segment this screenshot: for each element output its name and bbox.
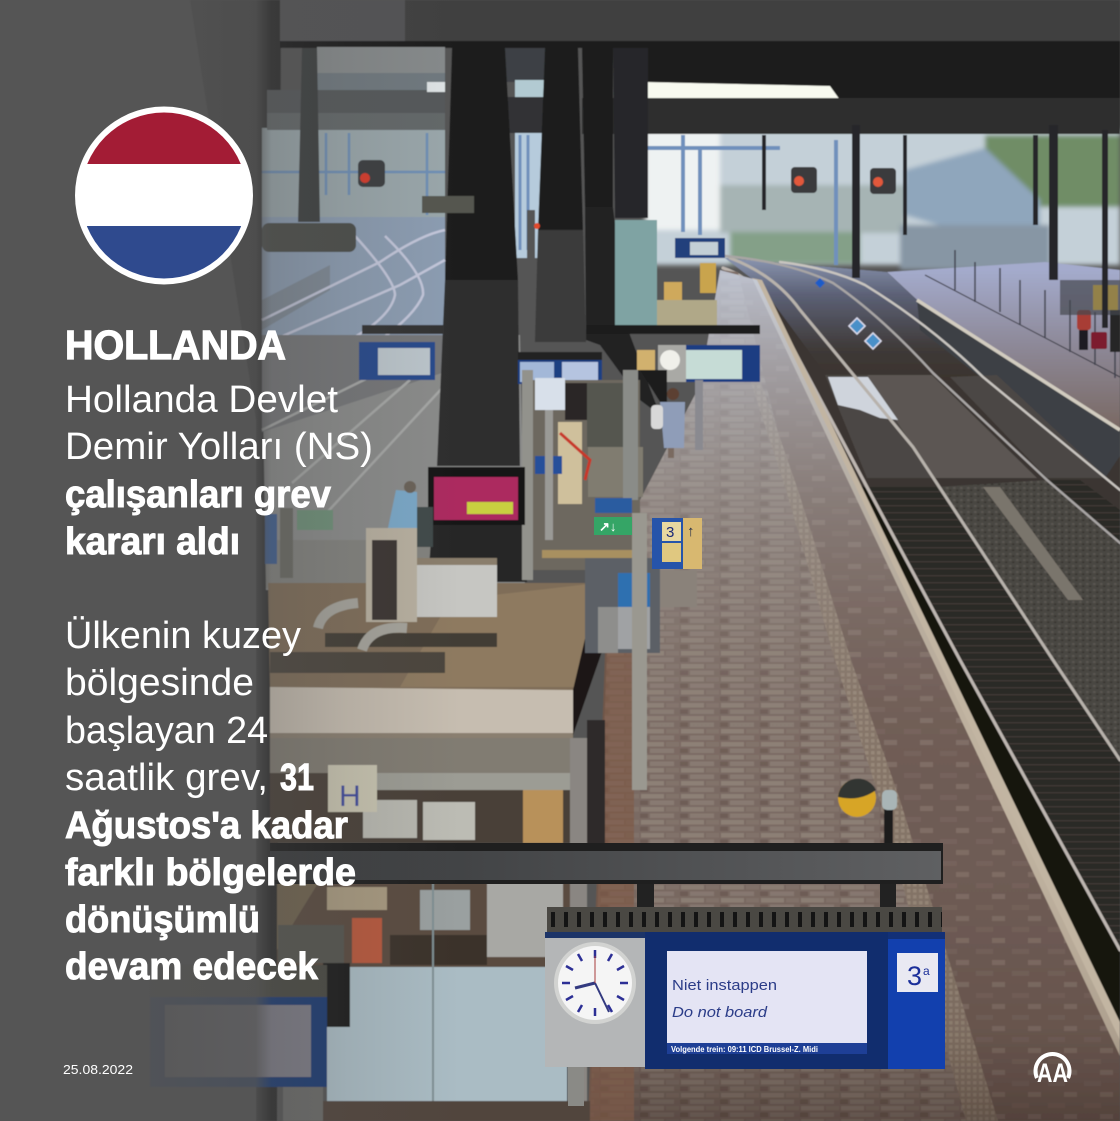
- departure board: [545, 907, 945, 1069]
- blue display panel: [645, 932, 888, 1069]
- sign post: [632, 513, 647, 790]
- logo: Anadolu Agency: AA: [1037, 1058, 1068, 1088]
- track marker diamonds: [815, 278, 881, 349]
- rooftop AC unit: [366, 528, 417, 622]
- subheading text block: çalışanları grev: [65, 474, 331, 516]
- left post and exit sign: [265, 514, 277, 564]
- lower left information board: [150, 965, 327, 1087]
- track bed: [725, 258, 1120, 1040]
- exit sign: ↗↓: [599, 519, 616, 534]
- body text block: dönüşümlü: [65, 899, 260, 941]
- rooftop box: [417, 558, 497, 617]
- body text block: [65, 615, 356, 988]
- yellow platform signs: [657, 238, 725, 325]
- clock: [554, 942, 636, 1024]
- walking passenger: [651, 388, 685, 458]
- sign board left: [359, 342, 435, 380]
- sign board right with clock: [660, 345, 760, 382]
- body text block: başlayan 24: [65, 710, 268, 752]
- exit sign: [594, 517, 632, 535]
- date: 25.08.2022: [63, 1062, 133, 1077]
- distant yard, left: [262, 128, 445, 345]
- departure board: Do not board: [672, 1004, 768, 1021]
- platform number sign: 3: [666, 524, 674, 541]
- departure board: Niet instappen: [672, 977, 777, 994]
- signal lights: [358, 160, 896, 194]
- far platform with fence: [887, 262, 1120, 430]
- body text block: saatlik grev,: [65, 757, 268, 799]
- H sign: [328, 765, 377, 813]
- flag of the Netherlands: [75, 106, 253, 284]
- distant yard and sky, right: [645, 130, 1120, 270]
- platform number sign: ↑: [687, 523, 694, 540]
- subheading text block: Hollanda Devlet: [65, 379, 338, 421]
- wet reflection on tracks: [803, 377, 898, 420]
- subheading text block: kararı aldı: [65, 521, 240, 563]
- departure board: a: [923, 964, 930, 978]
- body text block: bölgesinde: [65, 662, 254, 704]
- main platform surface: [590, 270, 1120, 1121]
- platform number sign: [652, 518, 702, 569]
- advert screen: [428, 467, 525, 525]
- departure board: 3: [907, 961, 922, 991]
- columns, right: [762, 125, 1108, 328]
- seated person: [388, 481, 433, 547]
- yellow platform lamp: [838, 779, 897, 844]
- heading: HOLLANDA: [65, 322, 286, 368]
- sign beams: [586, 325, 760, 334]
- rooftop: [268, 583, 598, 690]
- departure board: Volgende trein: 09:11 ICD Brussel-Z. Midi: [671, 1045, 818, 1054]
- rails: [723, 256, 1120, 950]
- left platform: [262, 335, 525, 590]
- sign board center: [518, 360, 602, 384]
- station interior behind pillars: [525, 380, 640, 570]
- pillars: [445, 48, 518, 280]
- ticket machine: [585, 558, 660, 653]
- body text block: farklı bölgelerde: [65, 852, 356, 894]
- body text block: devam edecek: [65, 946, 319, 988]
- body text block: Ülkenin kuzey: [65, 615, 301, 657]
- clock panel: [545, 936, 645, 1067]
- left vent and dark frame: [278, 925, 344, 963]
- H sign: H: [339, 780, 361, 813]
- shop below roof: [270, 738, 570, 773]
- left gray overlay panel: [0, 0, 460, 1121]
- canopy roof: [280, 0, 1120, 41]
- body text block: Ağustos'a kadar: [65, 805, 348, 847]
- platform number panel: [888, 932, 945, 1069]
- people on far platform: [1060, 280, 1120, 352]
- subheading text block: [65, 379, 373, 563]
- subheading text block: Demir Yolları (NS): [65, 426, 373, 468]
- body text block: 31: [280, 757, 314, 799]
- hanging beam: [270, 843, 943, 908]
